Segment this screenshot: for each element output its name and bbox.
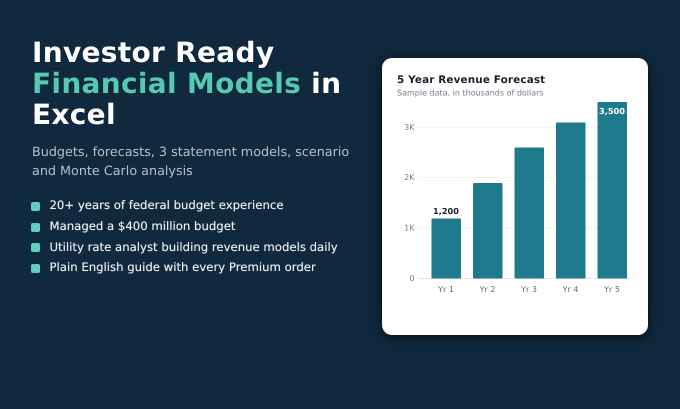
title: Financial Models in — [32, 67, 341, 100]
chart subtitle: Sample data, in thousands of dollars — [397, 88, 544, 98]
title — [32, 36, 341, 131]
x axis labels — [437, 285, 620, 294]
subtitle: Budgets, forecasts, 3 statement models, scenario — [32, 145, 349, 160]
x axis labels: Yr 1 — [437, 285, 454, 294]
bullet: analyst: Utility rate analyst building revenue models daily — [50, 240, 338, 254]
bullet list — [31, 198, 338, 274]
y axis labels: 2K — [404, 173, 415, 182]
y axis labels — [404, 123, 415, 283]
x axis labels: Yr 4 — [562, 285, 578, 294]
value label: Yr 1: 1,200 — [433, 206, 459, 216]
x axis labels: Yr 5 — [603, 285, 620, 294]
bullet: budget: Managed a $400 million budget — [50, 219, 235, 233]
panel: revenue chart card — [382, 58, 648, 335]
subtitle — [32, 145, 349, 178]
y axis labels: 3K — [404, 123, 415, 132]
value label: Yr 5: 3,500 — [599, 106, 625, 116]
x axis labels: Yr 2 — [479, 285, 495, 294]
x axis labels: Yr 3 — [520, 285, 537, 294]
bullet: experience: 20+ years of federal budget experience — [50, 198, 284, 212]
y axis labels: 1K — [404, 224, 415, 232]
title: Excel — [32, 98, 116, 131]
bullet: guide: Plain English guide with every Premium order — [50, 260, 316, 274]
bars — [432, 102, 627, 278]
chart title: 5 Year Revenue Forecast — [397, 74, 545, 86]
subtitle: and Monte Carlo analysis — [32, 164, 193, 178]
y axis labels: 0 — [409, 274, 414, 283]
title: Investor Ready — [32, 36, 274, 69]
